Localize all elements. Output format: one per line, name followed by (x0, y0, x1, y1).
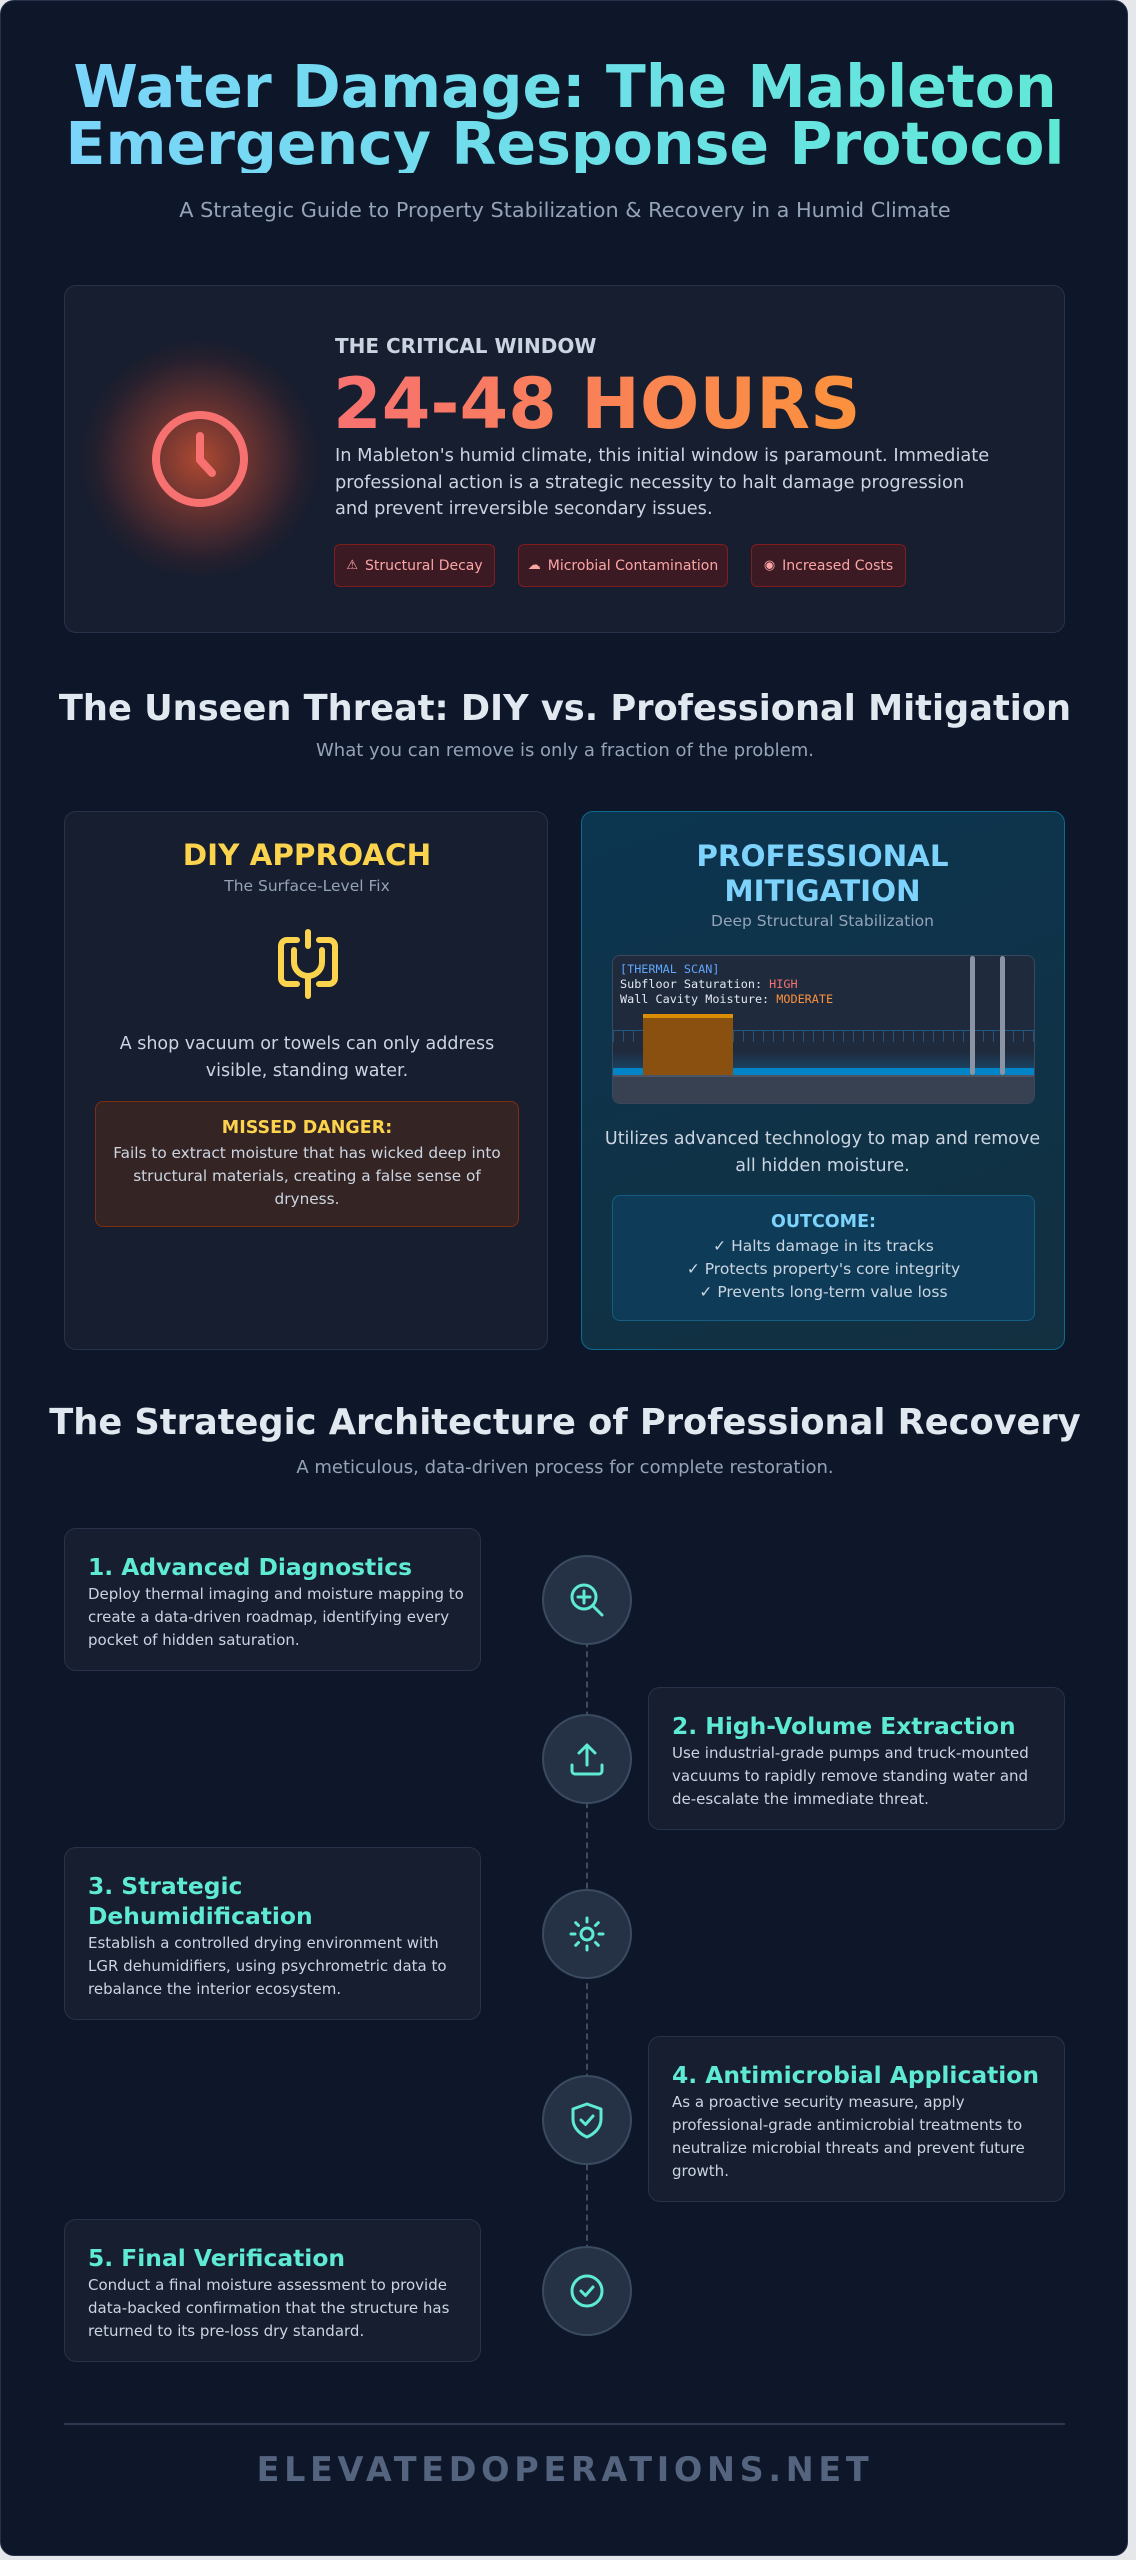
pro subtitle: Deep Structural Stabilization (711, 912, 934, 930)
pro title: MITIGATION (724, 874, 921, 908)
DIY subtitle: The Surface-Level Fix (224, 877, 390, 895)
tag: structural decay (334, 544, 495, 587)
step 2 card: Use industrial-grade pumps and truck-mounted vacuums to rapidly remove standing water and de-escalate the immediate threat. (672, 1744, 1029, 1808)
footer: ELEVATEDOPERATIONS.NET (257, 2450, 873, 2489)
tag: structural decay: ⚠ (346, 558, 358, 573)
step 3 card: 3. Strategic (88, 1872, 242, 1900)
step 3 card: Dehumidification (88, 1902, 313, 1930)
step 2 card: 2. High-Volume Extraction (672, 1712, 1016, 1740)
thermal scan graphic: Subfloor Saturation: HIGH (620, 977, 798, 991)
step 3 card (64, 1847, 481, 2020)
icon: upload (542, 1714, 632, 1804)
timeline line (586, 1601, 588, 2291)
step 5 card (64, 2219, 481, 2362)
callout: missed danger: Fails to extract moisture that has wicked deep into structural materials, creating a false sense of dryness. (113, 1144, 501, 1208)
callout: missed danger (95, 1101, 519, 1227)
callout: outcome: ✓ Prevents long-term value loss (699, 1283, 948, 1301)
step 1 card (64, 1528, 481, 1671)
pro title: PROFESSIONAL (696, 839, 949, 873)
tag: costs (751, 544, 906, 587)
step 4 card: As a proactive security measure, apply professional-grade antimicrobial treatments to neutralize microbial threats and prevent future growth. (672, 2093, 1025, 2180)
icon: vacuum (278, 929, 338, 999)
icon: magnifier (542, 1555, 632, 1645)
title: Emergency Response Protocol (66, 110, 1064, 178)
DIY text: A shop vacuum or towels can only address visible, standing water. (120, 1034, 494, 1081)
callout: missed danger: MISSED DANGER: (222, 1118, 392, 1138)
callout: outcome: OUTCOME: (771, 1212, 876, 1232)
tag: microbial: ☁ (528, 558, 541, 573)
callout: outcome (612, 1195, 1035, 1321)
thermal scan graphic: [THERMAL SCAN] (620, 962, 719, 976)
callout: outcome: ✓ Protects property's core integrity (687, 1260, 960, 1278)
step 4 card: 4. Antimicrobial Application (672, 2061, 1039, 2089)
panel: critical window (64, 285, 1065, 633)
step 4 card (648, 2036, 1065, 2202)
heading: unseen threat: The Unseen Threat: DIY vs. Professional Mitigation (59, 688, 1071, 729)
DIY title: DIY APPROACH (183, 838, 431, 872)
step 5 card: 5. Final Verification (88, 2244, 345, 2272)
subheading: What you can remove is only a fraction of the problem. (316, 740, 814, 761)
subheading: A meticulous, data-driven process for complete restoration. (296, 1457, 834, 1478)
step 3 card: Establish a controlled drying environment with LGR dehumidifiers, using psychrometric data to rebalance the interior ecosystem. (88, 1934, 447, 1998)
tag: microbial (518, 544, 728, 587)
thermal scan graphic: Wall Cavity Moisture: MODERATE (620, 992, 833, 1006)
callout: outcome: ✓ Halts damage in its tracks (713, 1237, 934, 1255)
thermal scan graphic (612, 955, 1035, 1104)
icon: sun (542, 1889, 632, 1979)
step 5 card: Conduct a final moisture assessment to provide data-backed confirmation that the structure has returned to its pre-loss dry standard. (88, 2276, 449, 2340)
panel: DIY (64, 811, 548, 1350)
big number: 24-48 HOURS (333, 363, 860, 445)
panel: professional (581, 811, 1065, 1350)
tag: costs: Increased Costs (782, 558, 893, 574)
icon: check (542, 2246, 632, 2336)
heading: strategic architecture: The Strategic Architecture of Professional Recovery (49, 1402, 1081, 1443)
pro title (696, 839, 949, 908)
pro text: Utilizes advanced technology to map and remove all hidden moisture. (605, 1129, 1040, 1176)
tag: microbial: Microbial Contamination (548, 558, 718, 574)
title: Water Damage: The Mableton (73, 53, 1057, 121)
label: THE CRITICAL WINDOW (335, 334, 596, 358)
icon: clock with glow (80, 339, 320, 579)
paragraph: In Mableton's humid climate, this initial window is paramount. Immediate professional action is a strategic necessity to halt damage progression and prevent irreversible secondary issues. (335, 445, 989, 519)
step 1 card: Deploy thermal imaging and moisture mapping to create a data-driven roadmap, identifying every pocket of hidden saturation. (88, 1585, 464, 1649)
tag: costs: ◉ (764, 558, 775, 573)
subtitle: A Strategic Guide to Property Stabilization & Recovery in a Humid Climate (179, 198, 951, 222)
step 2 card (648, 1687, 1065, 1830)
tag: structural decay: Structural Decay (365, 558, 483, 574)
step 1 card: 1. Advanced Diagnostics (88, 1553, 412, 1581)
icon: shield (542, 2075, 632, 2165)
title (1, 59, 1129, 173)
